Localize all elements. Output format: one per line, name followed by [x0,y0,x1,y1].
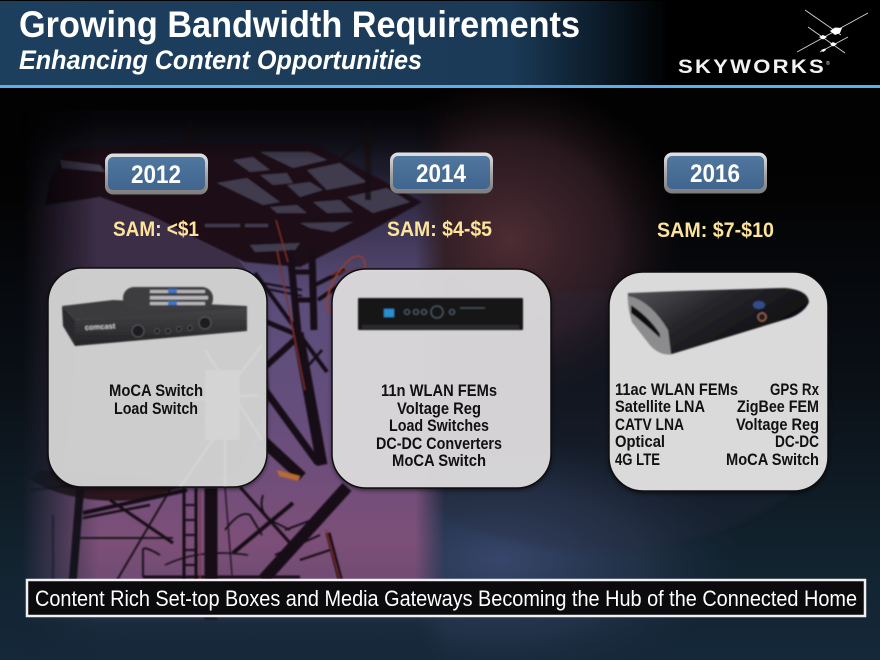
logo: Skyworks: SKYWORKS [678,56,826,78]
icon: media gateway [628,288,809,354]
text: 2012 components: MoCA Switch [109,382,203,400]
text: 2016 components left column [615,381,738,469]
text: 2016 components right column [726,381,820,469]
year badge 2016 [664,152,767,194]
logo: Skyworks: ® [826,60,830,67]
subtitle: Enhancing Content Opportunities [19,45,422,75]
panel: 2012 [48,268,267,489]
text: 2016 components right column: GPS Rx [770,381,820,399]
text: 2014 components: Load Switches [389,417,489,435]
icon: DirecTV receiver [358,298,523,330]
text: 2014 components [376,382,502,470]
text: 2016 components right column: MoCA Switch [726,451,819,469]
icon: Comcast set-top box with remote: comcast [85,321,116,332]
title: Growing Bandwidth Requirements [19,4,580,45]
panel: 2014 [332,269,551,490]
header band [0,0,880,88]
year badge 2014 [390,152,493,194]
text: 2016 components left column: Optical [615,433,665,451]
text: 2012 components: Load Switch [114,400,198,418]
callout: bottom banner [27,580,865,616]
SAM 2012: SAM: <$1 [113,217,199,241]
panel: 2016 [609,272,828,493]
text: 2014 components: MoCA Switch [392,452,486,470]
SAM 2014: SAM: $4-$5 [387,217,492,241]
logo: Skyworks [678,10,868,78]
text: 2016 components left column: CATV LNA [615,416,684,434]
text: 2012 components [109,382,203,418]
text: 2014 components: 11n WLAN FEMs [381,382,497,400]
year badge 2012: 2012 [131,161,181,189]
year badge 2014: 2014 [416,160,466,188]
text: 2014 components: DC-DC Converters [376,435,502,453]
text: 2014 components: Voltage Reg [397,400,481,418]
text: 2016 components left column: Satellite LNA [615,398,705,416]
text: 2016 components right column: ZigBee FEM [737,398,819,416]
text: 2016 components left column: 4G LTE [615,451,660,469]
text: 2016 components right column: Voltage Reg [736,416,819,434]
background photo: communications tower [28,120,442,631]
text: 2016 components left column: 11ac WLAN FEMs [615,381,738,399]
year badge 2016: 2016 [690,160,740,188]
year badge 2012 [105,154,208,194]
icon: Comcast set-top box with remote [62,287,247,346]
SAM 2016: SAM: $7-$10 [657,218,774,242]
text: 2016 components right column: DC-DC [775,433,819,451]
